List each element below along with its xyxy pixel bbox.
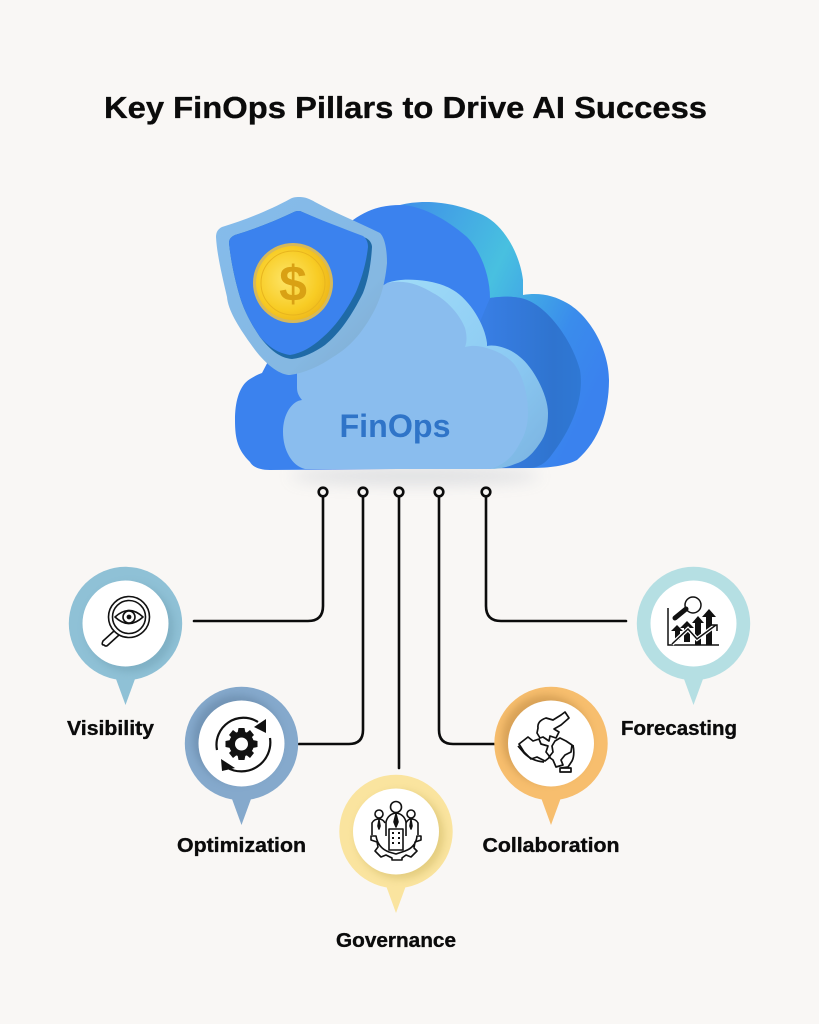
pin: [542, 799, 560, 825]
connector: Collaboration: [435, 488, 494, 744]
label: Optimization: [177, 835, 306, 857]
shield: [216, 197, 387, 375]
connector: Forecasting: [482, 488, 626, 621]
pillar: Forecasting: [621, 567, 750, 740]
pillar: Optimization: [177, 687, 306, 857]
connector: Governance: [395, 488, 403, 768]
illustration: FinOps cloud with shield: [216, 197, 609, 484]
pin: [684, 679, 703, 705]
label: Forecasting: [621, 718, 737, 740]
cloud label: FinOps: [340, 408, 450, 444]
label: Collaboration: [482, 835, 620, 857]
coin: [253, 243, 333, 323]
icon: magnifier with eye: [102, 596, 150, 646]
connector nodes and lines: [194, 488, 626, 768]
back cloud side: [400, 202, 609, 468]
back cloud face: [235, 205, 581, 470]
cloud shadow: [290, 468, 540, 484]
icon: gear with arrows: [216, 718, 270, 771]
shield inner dark edge: [229, 211, 372, 359]
pin: [232, 799, 251, 825]
title: Key FinOps Pillars to Drive AI Success: [104, 90, 707, 125]
label: Visibility: [67, 718, 155, 740]
pillar: Visibility: [67, 567, 182, 740]
pin: [116, 679, 135, 705]
connector: Optimization: [299, 488, 367, 744]
front cloud face: [283, 282, 528, 469]
icon: people and building on gear: [371, 802, 421, 860]
label: Governance: [336, 930, 456, 952]
connector: Visibility: [194, 488, 327, 621]
shield outer frame: [216, 197, 387, 375]
back cloud shaded right lobe: [470, 297, 581, 468]
pillar: Collaboration: [482, 687, 620, 857]
icon: growth chart with magnifier: [668, 597, 719, 645]
shield inner face: [229, 211, 368, 355]
dollar sign: $: [279, 256, 307, 312]
pillar: Governance: [336, 775, 456, 952]
pin: [386, 887, 406, 913]
icon: hands with puzzle pieces: [518, 712, 574, 772]
front cloud side: [387, 280, 548, 469]
